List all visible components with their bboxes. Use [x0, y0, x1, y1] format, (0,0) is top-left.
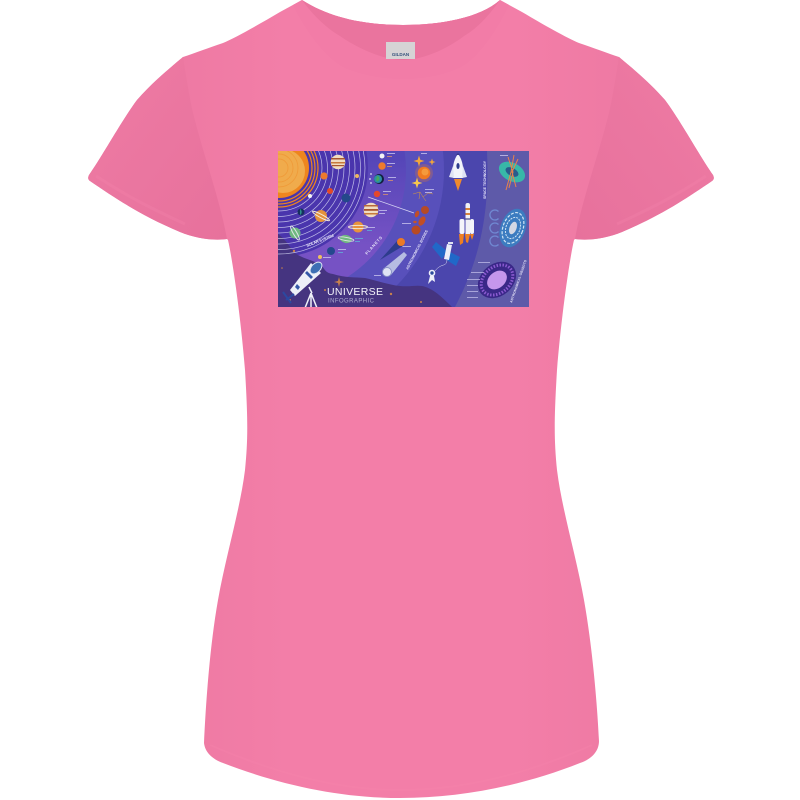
- heading: solar system: SOLAR SYSTEM: [306, 233, 335, 248]
- heading: astronomical bodies: ASTRONOMICAL BODIES: [405, 229, 429, 270]
- heading: planets: PLANETS: [364, 235, 383, 256]
- purple galaxy: [478, 262, 516, 298]
- right lighter band: [455, 151, 529, 307]
- striped planet: [364, 203, 378, 217]
- hill stars: [281, 250, 422, 303]
- space technology: rocket: [449, 153, 467, 191]
- neck label: [386, 42, 415, 59]
- right sleeve: [575, 57, 714, 240]
- asteroids: [421, 206, 429, 214]
- heading: space technology: SPACE TECHNOLOGY: [483, 160, 487, 199]
- satellite: [432, 242, 460, 266]
- neck label: GILDAN: [392, 52, 409, 57]
- left sleeve: [88, 57, 227, 240]
- space band: [348, 151, 444, 286]
- solar disc: [278, 151, 368, 255]
- inside back of collar: [302, 0, 500, 60]
- heading: astronomical objects: ASTRONOMICAL OBJECTS: [509, 259, 528, 303]
- black hole: [498, 154, 525, 190]
- title: INFOGRAPHIC: [328, 298, 375, 304]
- pointer line: [368, 197, 414, 213]
- astronaut: [428, 260, 447, 284]
- small ring gauges: [490, 210, 498, 246]
- star sun: [415, 164, 433, 182]
- solar system orbits: [278, 151, 366, 254]
- planets column: [327, 154, 386, 255]
- printed infographic panel: [278, 151, 529, 307]
- t-shirt: [88, 0, 714, 798]
- sleeve hem highlights: [96, 176, 185, 224]
- shirt body: [88, 0, 714, 798]
- body labels: [374, 153, 434, 276]
- solar system planets: [289, 155, 359, 259]
- bottom hem highlight: [210, 745, 592, 790]
- rocket launcher: [459, 203, 474, 245]
- galaxy labels: [467, 262, 490, 298]
- planet labels: [323, 153, 396, 258]
- comets: [380, 238, 407, 276]
- star: [334, 277, 344, 287]
- collar band: [293, 0, 509, 79]
- sun: [278, 151, 319, 208]
- panel background: [396, 151, 488, 307]
- jupiter: [331, 155, 345, 169]
- title: [328, 288, 383, 302]
- title: UNIVERSE: [327, 286, 383, 298]
- spiral galaxy: [500, 208, 526, 248]
- telescope: [283, 260, 324, 308]
- astronomical bodies: [412, 156, 436, 234]
- inner violet band: [298, 151, 406, 277]
- constellation: [413, 192, 433, 201]
- hill: [278, 234, 452, 307]
